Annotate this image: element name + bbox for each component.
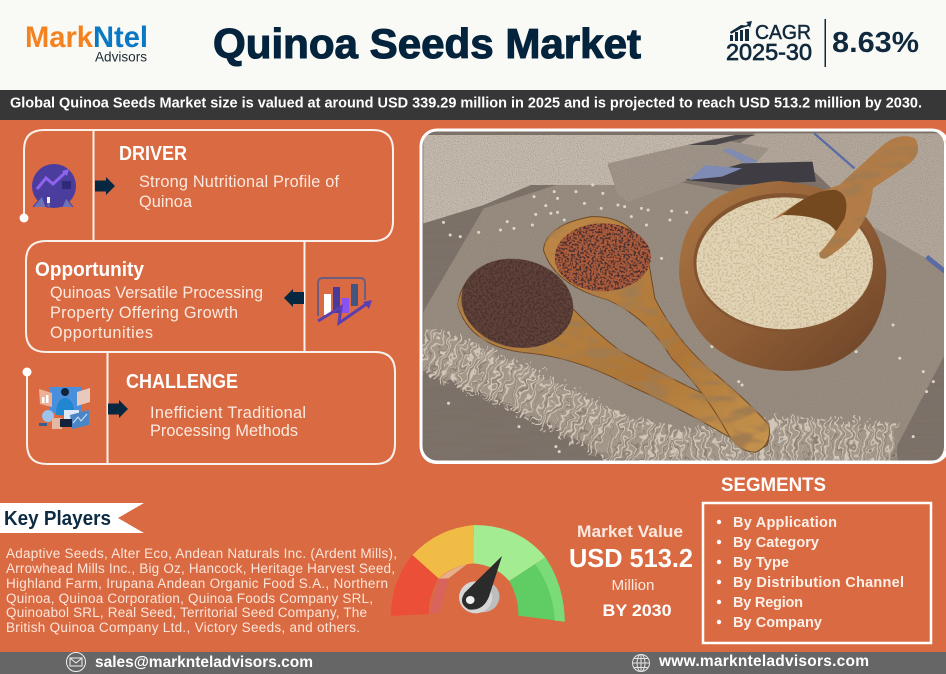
logo: MarkNtel [25,21,148,54]
text: opportunity: Quinoas Versatile Processing [50,284,263,302]
panel: driver [20,129,393,241]
text: opportunity [50,284,263,342]
panel: segments list: By Type [733,555,789,571]
subtitle strip [0,90,946,120]
text: challenge: Inefficient Traditional [150,404,306,422]
text: key players list: Quinoa, Quinoa Corporation, Quinoa Foods Company SRL, [6,591,373,606]
black seeds [461,258,574,348]
text: driver: Quinoa [139,193,193,211]
red-seed spoon [543,217,769,452]
title: Quinoa Seeds Market [213,20,641,67]
website address: www.marknteladvisors.com [658,653,869,670]
icon: driver globe [32,164,76,208]
burlap mat [423,168,946,460]
panel: segments list: By Category [733,535,819,551]
CAGR block [726,19,919,67]
scoop [772,136,918,259]
heading: challenge: CHALLENGE [126,371,238,393]
wooden bowl [679,181,886,371]
banner: key players [0,503,144,533]
heading: segments: SEGMENTS [721,475,826,496]
icon: analyst [39,387,90,429]
text: key players list [6,546,397,635]
arrow: challenge [108,400,128,418]
CAGR block: 8.63% [832,27,919,59]
CAGR block: 2025-30 [726,39,812,65]
text: key players list: Highland Farm, Irupana Andean Organic Food S.A., Northern [6,576,388,591]
header band [0,0,946,90]
heading: driver: DRIVER [119,143,187,165]
market value: Market Value [577,522,683,541]
text: opportunity: Property Offering Growth [50,304,238,322]
icon: opportunity chart [318,278,372,323]
text: key players list: British Quinoa Company Ltd., Victory Seeds, and others. [6,620,360,635]
text: challenge [150,404,306,440]
arrow: opportunity [284,289,304,307]
text: key players list: Quinoabol SRL, Real Seed, Territorial Seed Company, The [6,605,367,620]
logo: Advisors [95,48,147,64]
market value [569,522,693,620]
subtitle strip: Global Quinoa Seeds Market size is valued at around USD 339.29 million in 2025 and is projected to reach USD 513.2 million by 2030. [10,96,922,112]
blue stripes [688,165,742,180]
photo: quinoa seeds in wooden spoons and bowl [420,128,946,465]
heading: opportunity: Opportunity [35,259,145,281]
market value: BY 2030 [602,602,672,620]
panel: opportunity [26,241,372,353]
fringe [420,347,896,458]
text: driver: Strong Nutritional Profile of [139,173,339,191]
grains in bowl [696,197,873,329]
black-seed spoon [458,260,768,449]
panel: segments list: By Company [733,615,822,631]
top cloth [423,135,756,223]
market value: USD 513.2 [569,543,693,573]
text: challenge: Processing Methods [150,422,298,440]
dark fold [685,162,816,185]
text: opportunity: Opportunities [50,324,153,342]
text: key players list: Adaptive Seeds, Alter Eco, Andean Naturals Inc. (Ardent Mills), [6,546,397,561]
panel: segments list: By Distribution Channel [733,575,904,591]
panel: segments list: By Application [733,515,837,531]
text: driver [139,173,339,211]
banner: key players: Key Players [4,508,111,530]
CAGR block: CAGR [755,21,811,44]
gauge [391,525,565,622]
wood table [420,128,946,465]
panel: challenge [22,352,395,464]
text: key players list: Arrowhead Mills Inc., Big Oz, Hancock, Heritage Harvest Seed, [6,561,395,576]
cloth fold [608,138,769,202]
market value: Million [612,577,654,594]
footer bar [0,652,946,674]
icon: email [66,652,86,672]
icon: growth bars [730,21,752,41]
icon: globe [632,654,650,672]
scattered seeds [443,185,933,452]
panel: segments list: By Region [733,595,803,611]
email address: sales@marknteladvisors.com [95,654,313,671]
red seeds [555,223,651,291]
panel: segments list [703,503,931,643]
arrow: driver [95,177,115,195]
